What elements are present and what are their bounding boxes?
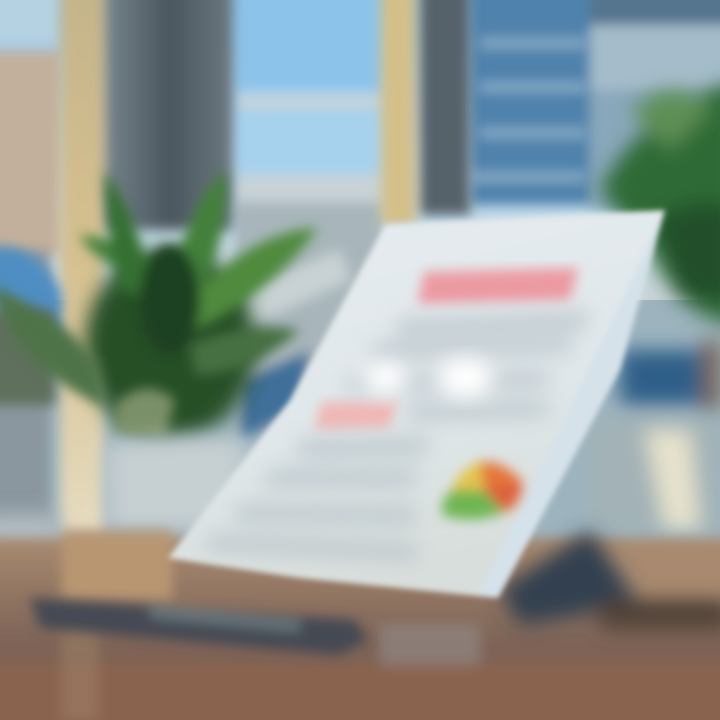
background: distant buildings [0, 0, 720, 530]
report text lines [204, 312, 590, 560]
plant: right background [600, 80, 720, 325]
blue arch on the left [0, 247, 62, 405]
right side: blue shadow and white pot [590, 340, 720, 530]
plant: centre [0, 170, 318, 440]
desk surface [0, 530, 720, 720]
pie chart [442, 462, 522, 519]
window columns [60, 0, 470, 535]
white plant pot [0, 437, 250, 550]
report heading bar [418, 268, 578, 304]
shadow under the report [500, 530, 720, 630]
dark device on desk [30, 598, 368, 655]
report subheading [314, 400, 398, 430]
report document [168, 210, 665, 598]
report white highlights [363, 358, 493, 398]
